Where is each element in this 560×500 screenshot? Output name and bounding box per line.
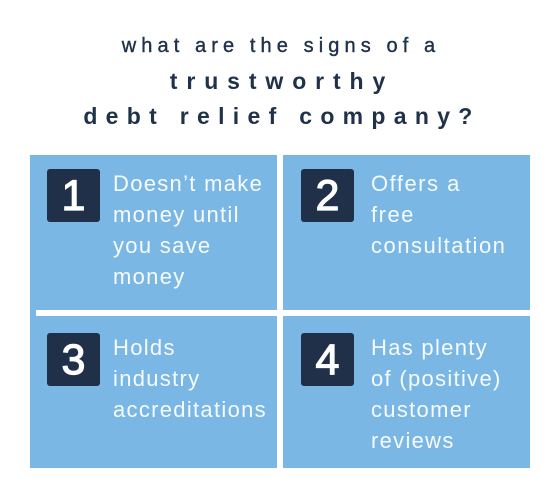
title: what are the signs of a	[122, 35, 440, 57]
sign 1 text: Doesn’t make	[113, 171, 263, 196]
title: trustworthy	[170, 68, 394, 94]
panel: sign 3	[30, 316, 277, 468]
panel: sign 1	[30, 155, 277, 310]
sign 3 text: industry	[113, 366, 200, 391]
title	[83, 35, 481, 129]
sign 4 text: reviews	[371, 428, 455, 453]
number badge 3: 3	[62, 336, 85, 384]
sign 1 text: money	[113, 264, 186, 289]
sign 4 text: Has plenty	[371, 335, 488, 360]
sign 2 text	[371, 171, 506, 258]
sign 4 text	[371, 335, 502, 453]
sign 3 text: Holds	[113, 335, 176, 360]
number badge 3	[47, 333, 100, 386]
number badge 4: 4	[316, 336, 339, 384]
title: debt relief company?	[83, 103, 481, 129]
sign 4 text: customer	[371, 397, 472, 422]
number badge 1	[47, 169, 100, 222]
sign 2 text: Offers a	[371, 171, 461, 196]
number badge 1: 1	[62, 172, 85, 220]
number badge 4	[301, 333, 354, 386]
sign 1 text	[113, 171, 263, 289]
sign 3 text: accreditations	[113, 397, 267, 422]
sign 1 text: you save	[113, 233, 211, 258]
panel: sign 2	[283, 155, 530, 310]
sign 1 text: money until	[113, 202, 240, 227]
sign 2 text: free	[371, 202, 415, 227]
panel: sign 4	[283, 316, 530, 468]
number badge 2	[301, 169, 354, 222]
sign 4 text: of (positive)	[371, 366, 502, 391]
sign 3 text	[113, 335, 267, 422]
number badge 2: 2	[316, 172, 339, 220]
sign 2 text: consultation	[371, 233, 506, 258]
